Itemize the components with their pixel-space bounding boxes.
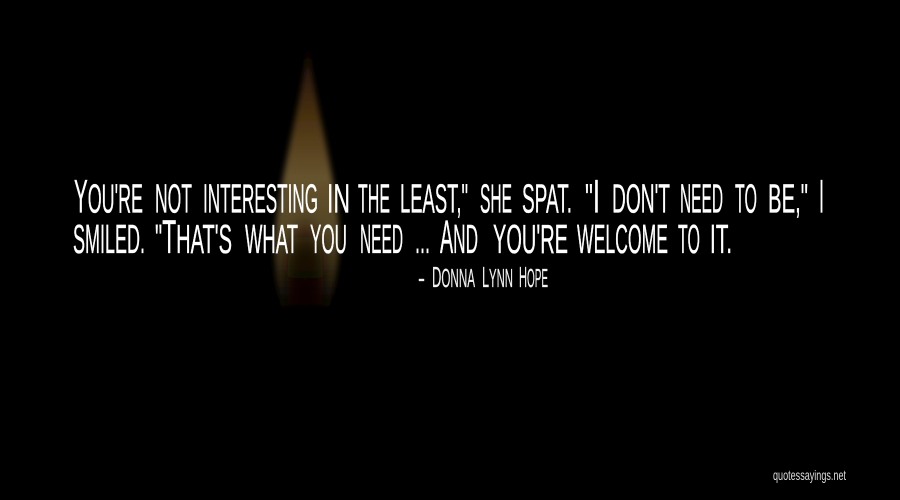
quote line 2	[73, 210, 732, 263]
quote line 1: BE,"	[768, 176, 808, 222]
quote line 1: SPAT.	[522, 176, 572, 222]
quote line 2: WHAT	[245, 216, 298, 262]
quote line 1: NEED	[680, 176, 723, 222]
quote line 2: YOU	[310, 216, 347, 262]
quote text	[73, 170, 824, 263]
quote line 1: "I	[585, 170, 600, 222]
text: HOPE	[519, 262, 548, 294]
attribution: LYNN	[482, 262, 513, 294]
attribution	[418, 262, 548, 294]
watermark: quotessayings.net	[773, 467, 846, 483]
quote line 1: LEAST,"	[400, 176, 468, 222]
quote line 1: IN	[327, 176, 350, 222]
quote line 2: AND	[440, 210, 478, 263]
quote line 1: INTERESTING	[203, 176, 318, 222]
quote line 1: THE	[358, 176, 390, 222]
icon: candle flame	[275, 42, 339, 330]
quote line 1: NOT	[155, 176, 192, 222]
attribution: DONNA	[432, 262, 475, 294]
quote line 2: NEED	[360, 216, 403, 262]
quote line 2: SMILED.	[73, 216, 145, 262]
quote line 1: SHE	[480, 176, 512, 222]
quote line 2: ...	[415, 216, 430, 262]
attribution: -	[418, 263, 425, 293]
quote line 2: TO	[678, 216, 700, 262]
quote line 2: YOU'RE	[493, 216, 568, 262]
quote line 1: YOU'RE	[74, 170, 143, 222]
quote line 1: DON'T	[612, 176, 670, 222]
quote line 2: "THAT'S	[155, 210, 232, 263]
quote line 2: WELCOME	[577, 216, 668, 262]
quote line 2: IT.	[710, 216, 732, 262]
text: I	[819, 170, 824, 222]
quote line 1	[74, 170, 824, 222]
quote line 1: TO	[735, 176, 757, 222]
